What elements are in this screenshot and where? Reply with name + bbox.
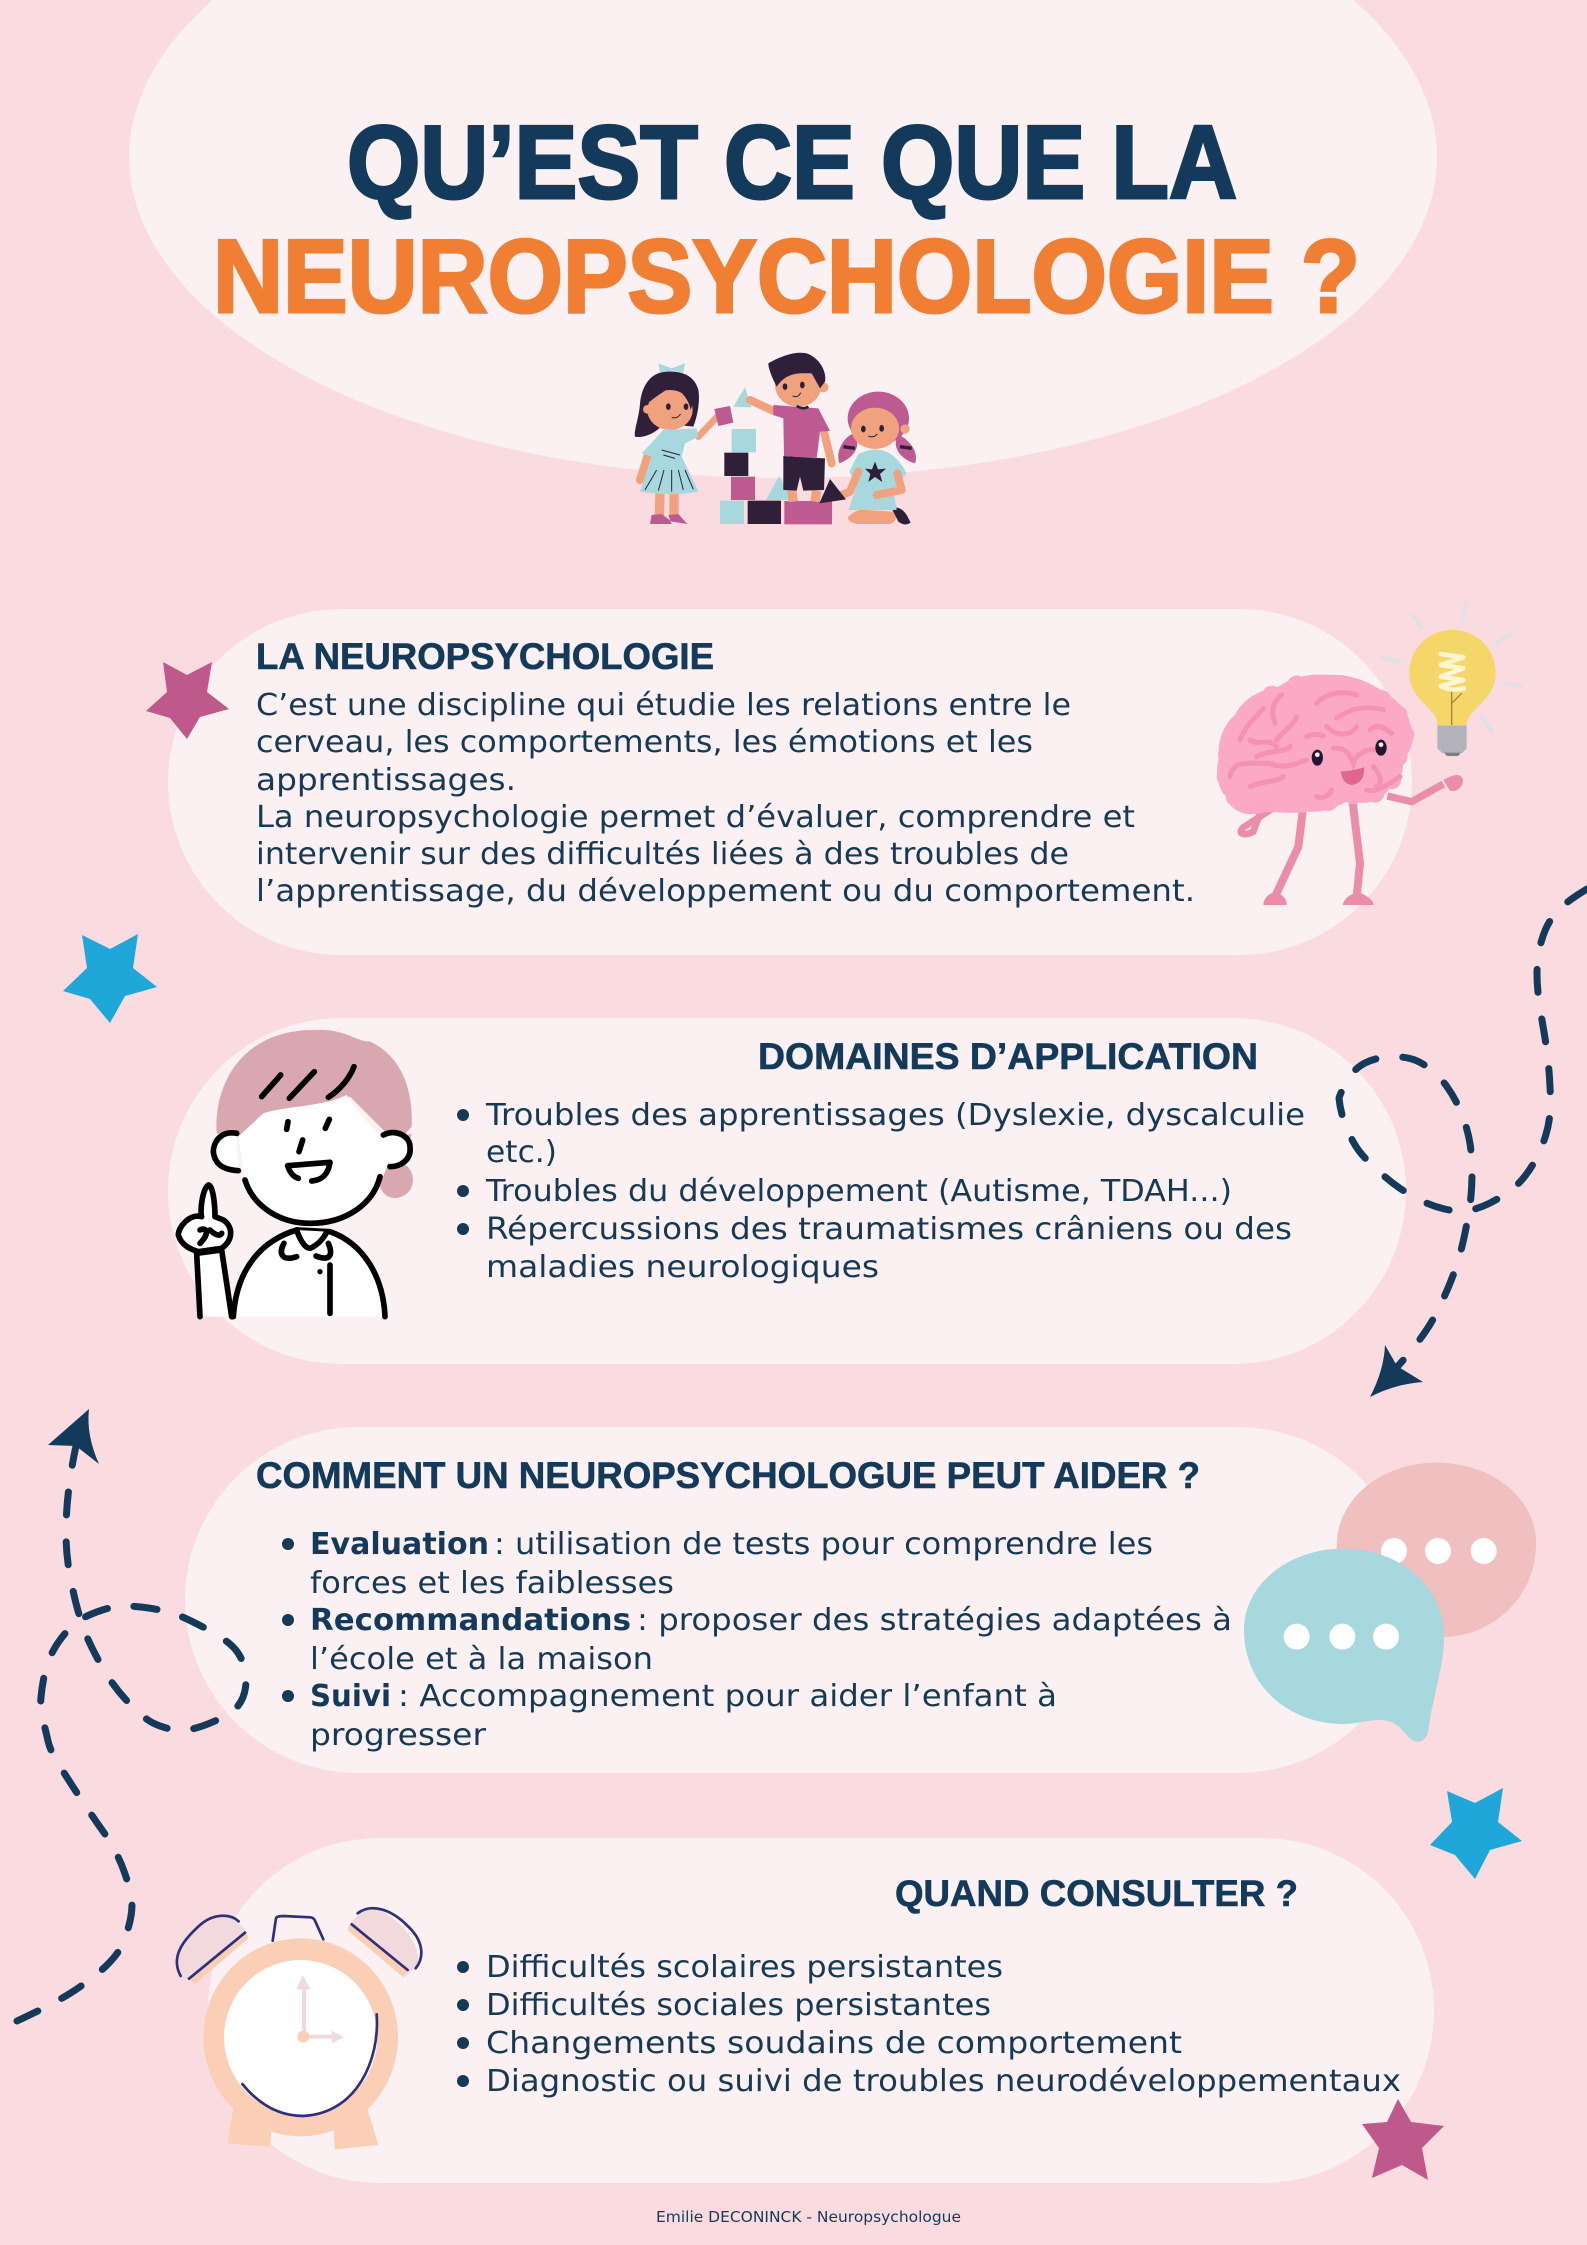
icon: light bulb <box>1382 604 1521 756</box>
icon: blue star right <box>1430 1788 1522 1879</box>
icon: blue star left <box>63 934 157 1023</box>
title: NEUROPSYCHOLOGIE ? <box>213 219 1360 335</box>
arrow: dashed loop right <box>1339 889 1587 1397</box>
bullet list: Diagnostic ou suivi de troubles neurodéveloppementaux <box>486 2064 1401 2099</box>
definition text <box>256 688 1195 909</box>
illustration: alarm clock <box>177 1908 421 2149</box>
bullet list: Changements soudains de comportement <box>486 2026 1182 2061</box>
bullet list: Suivi <box>310 1679 391 1714</box>
bullet list: maladies neurologiques <box>486 1250 879 1285</box>
illustration: brain holding light bulb <box>1217 604 1521 905</box>
illustration: person pointing finger <box>178 1030 413 1317</box>
title <box>213 105 1360 335</box>
bullet list: etc.) <box>486 1135 557 1170</box>
bullet list: forces et les faiblesses <box>310 1566 674 1601</box>
definition text: cerveau, les comportements, les émotions et les <box>256 725 1033 760</box>
heading: LA NEUROPSYCHOLOGIE <box>256 636 714 677</box>
bullet list <box>457 1950 1401 2099</box>
bullet list: Difficultés sociales persistantes <box>486 1988 991 2023</box>
illustration: speech bubbles <box>1244 1463 1536 1742</box>
bullet list: Troubles du développement (Autisme, TDAH...) <box>485 1174 1232 1209</box>
bullet list: progresser <box>310 1718 487 1753</box>
bullet list: Recommandations <box>310 1603 631 1638</box>
heading: QUAND CONSULTER ? <box>895 1873 1298 1914</box>
bullet list: Difficultés scolaires persistantes <box>486 1950 1003 1985</box>
bullet list: Evaluation <box>310 1527 489 1562</box>
bullet list: : Accompagnement pour aider l’enfant à <box>398 1679 1057 1714</box>
footer credit: Emilie DECONINCK - Neuropsychologue <box>656 2208 961 2226</box>
bullet list <box>457 1098 1305 1285</box>
definition text: intervenir sur des difficultés liées à des troubles de <box>256 837 1069 872</box>
definition text: La neuropsychologie permet d’évaluer, comprendre et <box>256 800 1135 835</box>
title: QU’EST CE QUE LA <box>347 105 1237 221</box>
bullet list: : proposer des stratégies adaptées à <box>637 1603 1232 1638</box>
definition text: l’apprentissage, du développement ou du comportement. <box>256 874 1195 909</box>
panel: la neuropsychologie <box>168 609 1412 955</box>
bullet list: l’école et à la maison <box>310 1642 653 1677</box>
panel: quand consulter <box>208 1838 1434 2183</box>
heading: COMMENT UN NEUROPSYCHOLOGUE PEUT AIDER ? <box>256 1455 1200 1496</box>
arrow: dashed loop left <box>17 1409 246 2021</box>
heading: DOMAINES D’APPLICATION <box>758 1036 1258 1077</box>
panel: domaines d'application <box>168 1018 1406 1364</box>
bullet list <box>282 1527 1232 1753</box>
bullet list: Répercussions des traumatismes crâniens ou des <box>486 1212 1292 1247</box>
title background ellipse <box>129 0 1437 478</box>
bullet list: : utilisation de tests pour comprendre les <box>494 1527 1153 1562</box>
definition text: apprentissages. <box>256 763 516 798</box>
icon: magenta star top left <box>146 662 229 739</box>
panel: comment un neuropsychologue peut aider <box>185 1427 1411 1773</box>
illustration: children building blocks <box>635 353 916 524</box>
icon: magenta star bottom right <box>1362 2099 1444 2180</box>
bullet list: Troubles des apprentissages (Dyslexie, dyscalculie <box>485 1098 1305 1133</box>
definition text: C’est une discipline qui étudie les relations entre le <box>256 688 1071 723</box>
